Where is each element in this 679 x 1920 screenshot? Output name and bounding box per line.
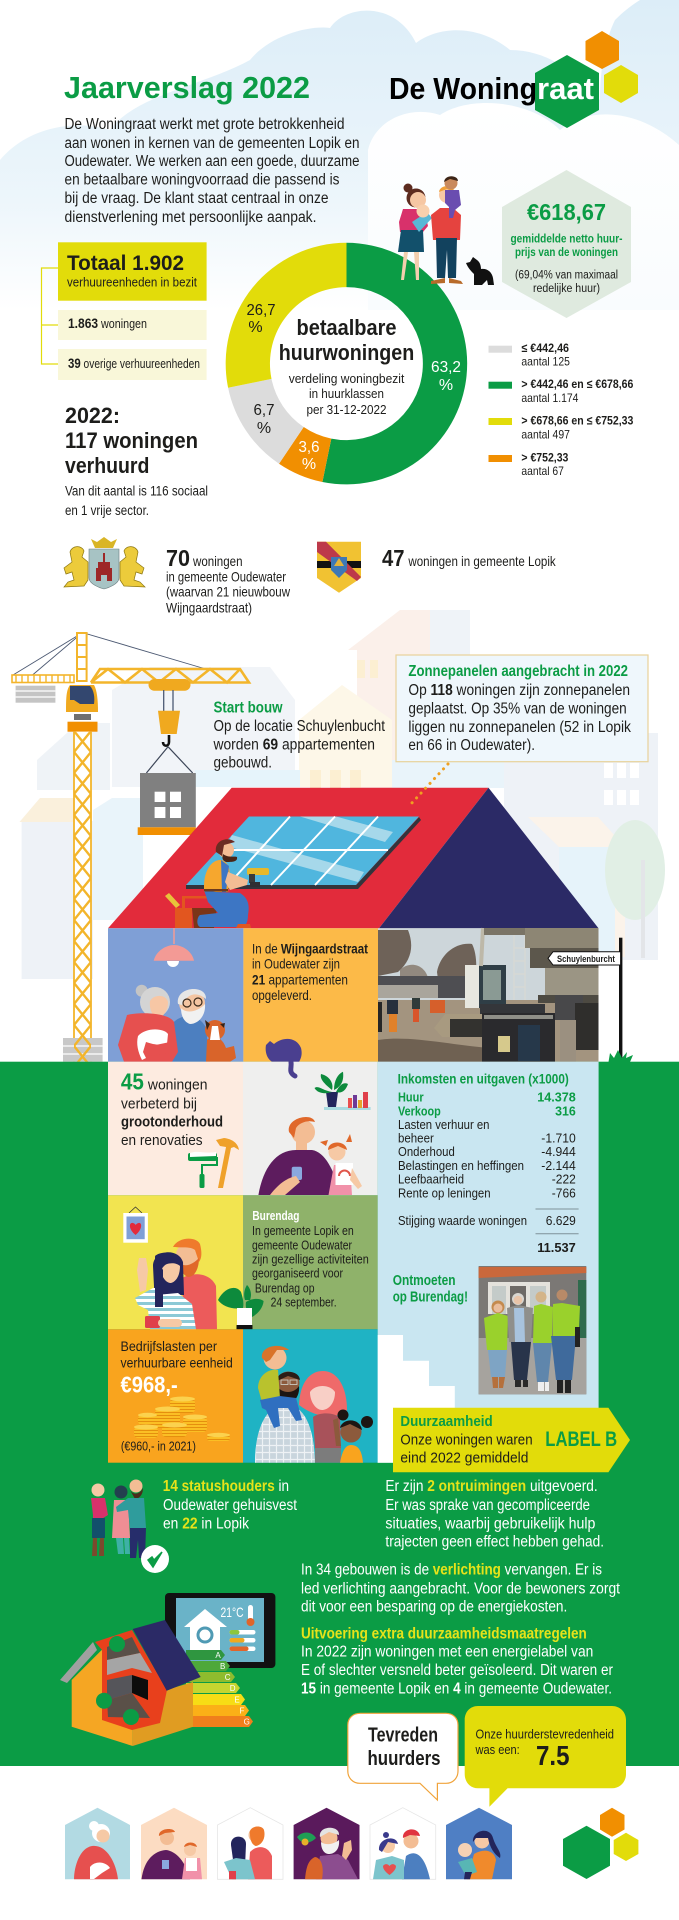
panel: total units bbox=[58, 242, 207, 301]
text: start bouw: gebouwd. bbox=[214, 755, 272, 772]
panel: Burendag: gemeente Oudewater bbox=[252, 1237, 353, 1252]
finance table: -4.944 bbox=[541, 1144, 576, 1159]
house tile: mother and baby bbox=[446, 1808, 512, 1879]
control box bbox=[482, 1013, 555, 1062]
label B arrow: eind 2022 gemiddeld bbox=[400, 1451, 528, 1467]
finance table: Leefbaarheid bbox=[398, 1171, 464, 1186]
intro text: en betaalbare woningvoorraad die passend is bbox=[64, 172, 340, 188]
heading: 117 homes let: 2022: bbox=[65, 403, 120, 428]
panel: blue room with grandparents bbox=[108, 928, 243, 1062]
text: status holders bbox=[163, 1478, 298, 1532]
panel: finance bbox=[378, 1062, 599, 1463]
house tile: grandfather and dog bbox=[294, 1808, 360, 1879]
donut percentages: % bbox=[302, 456, 316, 473]
intro text: dienstverlening met persoonlijke aanpak. bbox=[64, 209, 316, 226]
excavator bbox=[434, 1014, 482, 1037]
callout: solar panels: liggen nu zonnepanelen (52 in Lopik bbox=[408, 719, 631, 736]
label B arrow: Duurzaamheid bbox=[400, 1414, 493, 1430]
text: Oudewater: 70 bbox=[166, 545, 190, 571]
illustration: family with dog bbox=[398, 176, 494, 285]
panel: Wijngaardstraat: opgeleverd. bbox=[252, 987, 312, 1003]
illustration: roof worker bbox=[165, 839, 269, 928]
text: Lopik bbox=[382, 545, 557, 571]
donut center text: per 31-12-2022 bbox=[306, 402, 386, 417]
hexagon: average rent: (69,04% van maximaal bbox=[515, 270, 618, 282]
donut center text: in huurklassen bbox=[309, 386, 384, 401]
text: extra sustainability: 15 in gemeente Lopik en 4 in gemeente Oudewater. bbox=[301, 1680, 612, 1697]
intro text: Oudewater. We werken aan een goede, duurzame bbox=[64, 153, 360, 170]
speech bubble: satisfaction score bbox=[465, 1706, 626, 1807]
text: extra sustainability: Uitvoering extra duurzaamheidsmaatregelen bbox=[301, 1625, 587, 1642]
text: meet on Burendag: Ontmoeten bbox=[393, 1273, 456, 1289]
donut center text: verdeling woningbezit bbox=[289, 371, 405, 386]
finance table: beheer bbox=[398, 1131, 434, 1146]
logo mark: hexagons bbox=[563, 1808, 638, 1879]
hexagon: average rent bbox=[502, 170, 631, 318]
donut center text: betaalbare bbox=[296, 315, 396, 340]
speech bubble: tevreden huurders bbox=[348, 1713, 458, 1800]
illustration: smart thermostat bbox=[165, 1593, 275, 1668]
heading: 117 homes let: 117 woningen bbox=[65, 428, 198, 453]
white lower band bbox=[0, 1766, 679, 1920]
panel: operating costs: (€960,- in 2021) bbox=[121, 1440, 196, 1454]
finance table: Verkoop bbox=[398, 1103, 441, 1118]
heading: 117 homes let: Van dit aantal is 116 sociaal bbox=[65, 484, 208, 499]
panel: total units: verhuureenheden in bezit bbox=[67, 275, 197, 290]
text: meet on Burendag bbox=[393, 1273, 468, 1306]
panel: major maintenance: en renovaties bbox=[121, 1132, 203, 1149]
workers and container bbox=[430, 1000, 445, 1013]
panel: neighbours couple bbox=[108, 1195, 243, 1329]
donut percentages: 3,6 bbox=[298, 439, 320, 456]
finance table: Belastingen en heffingen bbox=[398, 1158, 524, 1173]
white stairs bbox=[378, 1335, 455, 1463]
insulation markers bbox=[96, 1636, 139, 1725]
finance table: -2.144 bbox=[541, 1158, 576, 1173]
panel: operating costs: €968,- bbox=[120, 1372, 178, 1398]
panel: major maintenance: woningen bbox=[147, 1076, 208, 1093]
label B arrow: Onze woningen waren bbox=[400, 1432, 533, 1448]
legend: > €752,33 bbox=[521, 450, 569, 464]
text: Oudewater: woningen bbox=[192, 553, 242, 569]
text: lighting: dit voor een besparing op de energiekosten. bbox=[301, 1599, 567, 1616]
text: extra sustainability bbox=[301, 1625, 613, 1697]
speech bubble: tevreden huurders: Tevreden bbox=[368, 1725, 438, 1747]
finance table bbox=[398, 1090, 576, 1255]
illustration: energy labels: D bbox=[230, 1684, 236, 1693]
callout: solar panels: en 66 in Oudewater). bbox=[408, 737, 535, 754]
illustration: energy labels: G bbox=[244, 1718, 250, 1726]
illustration: man bbox=[173, 1239, 217, 1329]
finance table: Rente op leningen bbox=[398, 1185, 491, 1200]
panel: other units: 39 overige verhuureenheden bbox=[68, 355, 200, 371]
donut percentages bbox=[246, 302, 461, 473]
panel: major maintenance bbox=[108, 1062, 243, 1195]
panel: finance: Inkomsten en uitgaven (x1000) bbox=[398, 1071, 569, 1086]
illustration: cat bbox=[266, 1039, 302, 1082]
ground bbox=[378, 1000, 598, 1062]
text: lighting: In 34 gebouwen is de verlichting vervangen. Er is bbox=[301, 1561, 602, 1578]
text: extra sustainability: E of slechter versneld beter geïsoleerd. Dit waren er bbox=[301, 1662, 613, 1679]
intro text: De Woningraat werkt met grote betrokkenheid bbox=[64, 116, 344, 133]
text: Oudewater: Wijngaardstraat) bbox=[166, 600, 252, 616]
title: Jaarverslag 2022 bbox=[64, 70, 310, 105]
text: evictions: trajecten geen effect hebben gehad. bbox=[385, 1534, 604, 1551]
hexagon: average rent: prijs van de woningen bbox=[515, 247, 618, 259]
finance table: Onderhoud bbox=[398, 1144, 455, 1159]
panel: total units: Totaal 1.902 bbox=[67, 252, 184, 275]
text: Oudewater bbox=[166, 545, 291, 616]
illustration: energy labels bbox=[186, 1650, 253, 1727]
legend: > €678,66 en ≤ €752,33 bbox=[521, 414, 634, 428]
donut chart bbox=[226, 243, 467, 484]
solar panel bbox=[186, 816, 421, 889]
illustration: father bbox=[258, 1117, 341, 1195]
intro text: bij de vraag. De klant staat centraal in onze bbox=[64, 190, 328, 207]
donut percentages: % bbox=[248, 319, 263, 336]
text: evictions: Er zijn 2 ontruimingen uitgevoerd. bbox=[385, 1478, 598, 1495]
panel: Burendag: 24 september. bbox=[271, 1295, 337, 1310]
illustration: energy labels: E bbox=[234, 1696, 240, 1704]
donut percentages: 63,2 bbox=[431, 359, 461, 376]
logo: De Woningraat: De Woning bbox=[389, 71, 537, 106]
donut percentages: 6,7 bbox=[254, 402, 275, 419]
background city bbox=[20, 610, 665, 979]
legend: ≤ €442,46 bbox=[521, 341, 569, 355]
house tile: mother and father bbox=[370, 1808, 436, 1879]
panel: Burendag bbox=[243, 1195, 378, 1329]
logo: De Woningraat: raat bbox=[537, 71, 594, 106]
text: evictions: Er was sprake van gecompliceerde bbox=[385, 1497, 590, 1514]
icon: coat of arms Lopik bbox=[317, 542, 361, 593]
house tile: couple bbox=[218, 1808, 283, 1879]
text: status holders: 14 statushouders in bbox=[163, 1478, 289, 1495]
background clouds bbox=[0, 0, 679, 310]
panel: operating costs: verhuurbare eenheid bbox=[120, 1354, 233, 1370]
finance table: 6.629 bbox=[546, 1213, 576, 1228]
panel: Wijngaardstraat: 21 appartementen bbox=[252, 971, 348, 987]
text: status holders: Oudewater gehuisvest bbox=[163, 1497, 298, 1514]
text: extra sustainability: In 2022 zijn woningen met een energielabel van bbox=[301, 1644, 593, 1661]
finance table: Stijging waarde woningen bbox=[398, 1213, 527, 1228]
text: evictions bbox=[385, 1478, 604, 1551]
icon: check badge bbox=[141, 1545, 169, 1573]
finance table: Huur bbox=[398, 1090, 424, 1105]
illustration: energy labels: A bbox=[215, 1651, 221, 1660]
cat tail bbox=[291, 1062, 295, 1076]
icon: framed heart bbox=[123, 1207, 148, 1243]
legend: aantal 67 bbox=[521, 464, 564, 478]
photo: neighbours bbox=[479, 1266, 586, 1394]
text: Lopik: woningen in gemeente Lopik bbox=[408, 553, 557, 569]
house tile: grandmother bbox=[65, 1808, 130, 1879]
text: meet on Burendag: op Burendag! bbox=[393, 1290, 468, 1306]
logo: De Woningraat bbox=[389, 31, 638, 128]
legend: aantal 125 bbox=[521, 355, 570, 369]
illustration: smart thermostat: 21°C bbox=[220, 1604, 244, 1620]
panel: father and daughter bbox=[243, 1062, 378, 1195]
dotted line bbox=[410, 764, 448, 805]
text: evictions: situaties, waarbij gebruikelijk hulp bbox=[385, 1515, 595, 1532]
legend: aantal 497 bbox=[521, 427, 570, 441]
heading: 117 homes let bbox=[65, 403, 208, 518]
finance table: -1.710 bbox=[541, 1131, 576, 1146]
panel: Burendag: Burendag bbox=[252, 1208, 299, 1223]
finance table: -222 bbox=[552, 1171, 576, 1186]
callout: solar panels: Zonnepanelen aangebracht in 2022 bbox=[408, 663, 628, 680]
illustration: grandmother bbox=[118, 985, 178, 1062]
panel: major maintenance: grootonderhoud bbox=[121, 1114, 223, 1131]
text: start bouw bbox=[213, 699, 386, 772]
callout: solar panels bbox=[396, 655, 648, 762]
text: start bouw: worden 69 appartementen bbox=[213, 736, 375, 753]
finance table: 316 bbox=[555, 1103, 576, 1118]
illustration: girl bbox=[333, 1410, 373, 1463]
label B arrow: LABEL B bbox=[545, 1428, 617, 1451]
label B arrow bbox=[393, 1408, 630, 1472]
hexagon: average rent: gemiddelde netto huur- bbox=[510, 234, 623, 246]
legend: > €442,46 en ≤ €678,66 bbox=[521, 377, 634, 391]
green ground bbox=[0, 1062, 679, 1766]
trees bbox=[378, 930, 476, 994]
icon: lamp bbox=[154, 928, 194, 967]
hexagon: average rent: €618,67 bbox=[527, 199, 606, 225]
text: Lopik: 47 bbox=[382, 545, 404, 571]
icon: coat of arms Oudewater bbox=[64, 537, 145, 589]
panel: major maintenance: 45 bbox=[121, 1068, 144, 1094]
speech bubble: tevreden huurders: huurders bbox=[368, 1748, 440, 1770]
heading: 117 homes let: verhuurd bbox=[65, 453, 149, 478]
illustration: daughter bbox=[320, 1134, 362, 1195]
legend bbox=[488, 341, 634, 478]
illustration: insulated house bbox=[60, 1620, 201, 1746]
house tile: father and daughter bbox=[141, 1808, 207, 1879]
finance table: -766 bbox=[552, 1185, 576, 1200]
illustration: energy labels: F bbox=[240, 1706, 245, 1716]
donut percentages: % bbox=[257, 420, 271, 437]
donut center text: huurwoningen bbox=[279, 340, 414, 365]
speech bubble: satisfaction score: 7.5 bbox=[536, 1740, 570, 1771]
panel: Burendag: Burendag op bbox=[255, 1281, 314, 1296]
finance table: 11.537 bbox=[537, 1240, 576, 1255]
panel: major maintenance: verbeterd bij bbox=[121, 1095, 197, 1112]
illustration: status holders bbox=[91, 1480, 169, 1573]
finance table: Lasten verhuur en bbox=[398, 1117, 490, 1132]
panel: operating costs: Bedrijfslasten per bbox=[120, 1338, 217, 1354]
text: Oudewater: (waarvan 21 nieuwbouw bbox=[166, 584, 291, 600]
people in photo bbox=[484, 1290, 580, 1393]
panel: operating costs bbox=[108, 1329, 243, 1463]
rig frame bbox=[481, 928, 483, 966]
callout: solar panels: Op 118 woningen zijn zonnepanelen bbox=[408, 682, 630, 699]
street sign: Schuylenburcht bbox=[557, 954, 616, 965]
speech bubble: satisfaction score: was een: bbox=[475, 1742, 520, 1757]
icon: coins bbox=[134, 1396, 230, 1441]
text: start bouw: Start bouw bbox=[214, 699, 283, 716]
icon: hammer bbox=[216, 1138, 239, 1188]
text: lighting: led verlichting aangebracht. Voor de bewoners zorgt bbox=[301, 1580, 621, 1597]
illustration: father and child bbox=[255, 1346, 315, 1463]
finance table: 14.378 bbox=[537, 1090, 576, 1105]
panel: dwellings bbox=[58, 310, 207, 340]
panel: dwellings: 1.863 woningen bbox=[68, 315, 147, 331]
panel: Burendag: In gemeente Lopik en bbox=[252, 1223, 354, 1238]
street sign bbox=[548, 938, 622, 1062]
panel: Wijngaardstraat: in Oudewater zijn bbox=[252, 955, 340, 971]
text: Oudewater: in gemeente Oudewater bbox=[166, 569, 286, 585]
donut percentages: % bbox=[439, 377, 453, 394]
illustration: energy labels: B bbox=[220, 1662, 225, 1671]
illustration: mother bbox=[299, 1371, 347, 1463]
intro text bbox=[64, 116, 360, 226]
legend: aantal 1.174 bbox=[521, 391, 579, 405]
illustration: energy labels: C bbox=[225, 1673, 231, 1682]
panel: Burendag: georganiseerd voor bbox=[252, 1266, 344, 1281]
callout: solar panels: geplaatst. Op 35% van de woningen bbox=[408, 700, 627, 717]
donut percentages: 26,7 bbox=[246, 302, 276, 319]
donut center text bbox=[279, 315, 414, 417]
speech bubble: satisfaction score: Onze huurderstevredenheid bbox=[476, 1726, 614, 1741]
intro text: aan wonen in kernen van de gemeenten Lopik en bbox=[64, 135, 360, 152]
illustration: tower crane bbox=[12, 633, 249, 1062]
icon: dog bbox=[466, 257, 494, 285]
panel: Burendag: zijn gezellige activiteiten bbox=[252, 1251, 369, 1266]
panel: other units bbox=[58, 349, 207, 380]
row of houses bbox=[378, 976, 473, 998]
icon: potted plant bbox=[218, 1285, 264, 1329]
heading: 117 homes let: en 1 vrije sector. bbox=[65, 503, 149, 518]
text: status holders: en 22 in Lopik bbox=[163, 1515, 249, 1532]
icon: plant on shelf bbox=[314, 1072, 371, 1110]
illustration: grandfather bbox=[170, 989, 210, 1062]
photo: construction site bbox=[378, 928, 598, 1062]
illustration: woman bbox=[135, 1252, 196, 1329]
panel: Wijngaardstraat bbox=[243, 928, 378, 1082]
panel: family bbox=[243, 1329, 378, 1463]
text: start bouw: Op de locatie Schuylenbucht bbox=[214, 718, 386, 735]
connector lines bbox=[42, 268, 58, 364]
hexagon: average rent: redelijke huur) bbox=[533, 283, 600, 295]
icon: paint roller bbox=[188, 1152, 217, 1188]
text: lighting bbox=[301, 1561, 621, 1616]
grass tuft bbox=[608, 1050, 633, 1062]
panel: Wijngaardstraat: In de Wijngaardstraat bbox=[252, 940, 368, 956]
illustration: dog bbox=[205, 1020, 236, 1062]
illustration: house roof bbox=[108, 764, 598, 928]
